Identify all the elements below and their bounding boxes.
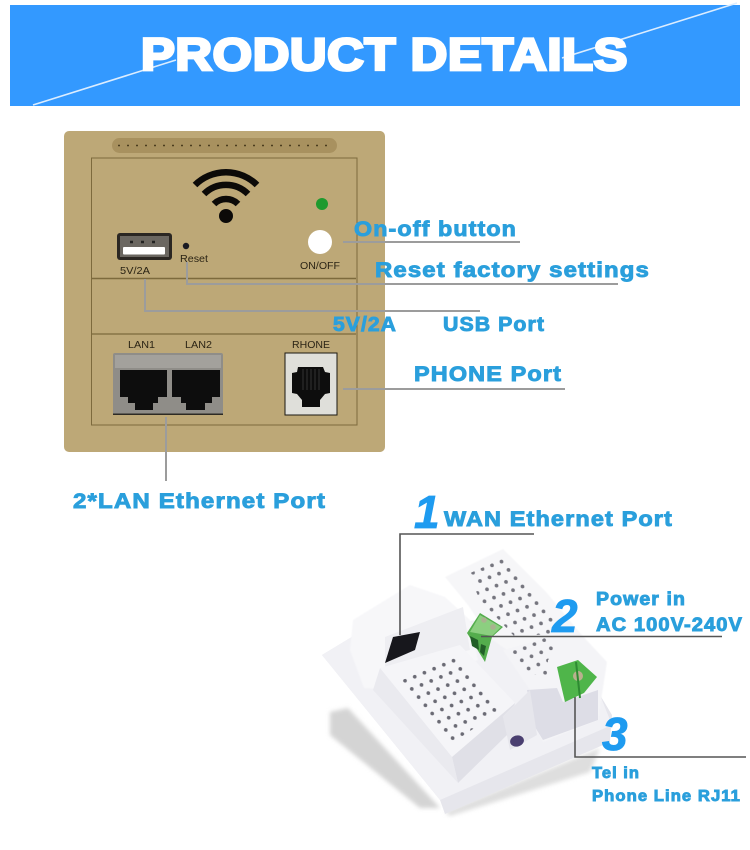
reset pinhole [183,243,189,249]
LAN labels [128,339,212,351]
green power terminal [467,613,503,662]
LAN labels: LAN2 [185,339,212,351]
label: USB port: USB Port [443,314,545,336]
number 3: 3 [602,708,628,760]
LAN labels: LAN1 [128,339,155,351]
on/off text: ON/OFF [300,260,340,272]
label: on-off button: On-off button [354,218,517,241]
speaker slot [112,138,337,153]
reset text: Reset [180,253,208,265]
label: reset factory settings: Reset factory settings [375,259,650,282]
phone port [285,353,337,415]
WAN port [385,632,420,663]
on/off button [308,230,332,254]
usb rating text: 5V/2A [120,265,150,277]
RHONE label: RHONE [292,339,330,351]
label: 5V/2A: 5V/2A [333,314,397,336]
inner frame [92,158,357,425]
device photo: wall socket back [322,549,612,816]
screw hole [509,734,525,748]
label: WAN ethernet port: WAN Ethernet Port [444,508,673,531]
icon: green LED [316,198,328,210]
label: tel in: Tel in [592,765,640,782]
label: LAN ethernet port: 2*LAN Ethernet Port [73,490,326,513]
LAN ports [113,353,223,415]
label: power in: Power in [596,589,686,609]
number 2: 2 [551,590,578,642]
right terminal block [503,633,607,750]
number 1: 1 [414,486,440,538]
base plate [322,620,612,814]
title: PRODUCT DETAILS [141,29,628,80]
label: AC voltage: AC 100V-240V [596,615,743,636]
leader lines: back panel [400,534,746,757]
icon: wifi [195,172,257,223]
shadow [330,708,600,816]
usb port [117,233,172,260]
lower perforated block [373,645,515,783]
green phone terminal [557,660,597,702]
leader lines: front panel [145,242,618,481]
label: phone port: PHONE Port [414,363,562,386]
label: phone line: Phone Line RJ11 [592,788,741,805]
panel: wall socket front [64,131,385,452]
banner [10,3,740,106]
WAN housing [350,585,478,690]
upper perforated block [445,549,580,650]
